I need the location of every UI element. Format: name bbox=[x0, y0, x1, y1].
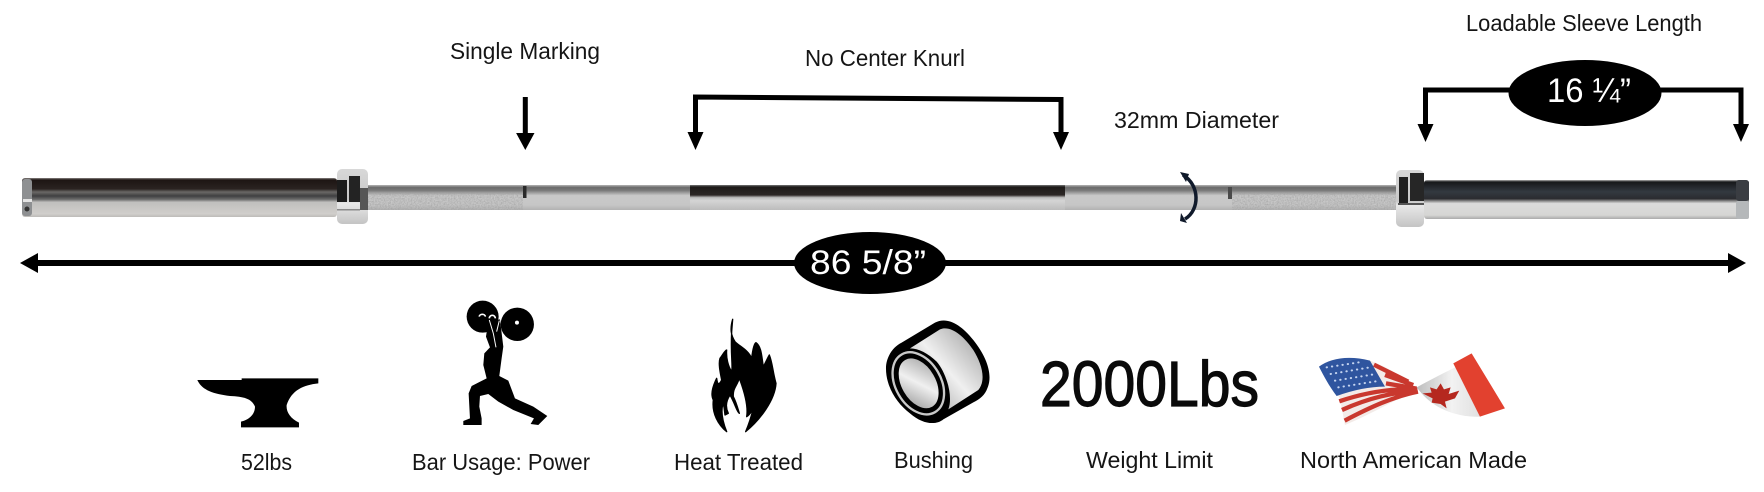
arrow: single marking bbox=[516, 97, 534, 150]
right sleeve end cap bbox=[1736, 180, 1749, 219]
bracket: sleeve length bbox=[1418, 90, 1749, 142]
right knurl marking bbox=[1228, 187, 1232, 199]
label: heat treated: Heat Treated bbox=[674, 449, 803, 475]
icon: flame bbox=[712, 319, 776, 432]
shaft: smooth center section bbox=[690, 185, 1065, 210]
badge: overall length value: 86 5/8” bbox=[810, 244, 926, 282]
right collar bbox=[1396, 170, 1424, 227]
label: weight: 52lbs bbox=[241, 449, 292, 475]
badge: sleeve length value: 16 ¼” bbox=[1547, 72, 1631, 110]
shaft: right knurled section bbox=[1065, 185, 1396, 210]
barbell bbox=[22, 169, 1749, 227]
label: weight limit: Weight Limit bbox=[1086, 447, 1214, 473]
figure: weight limit value: 2000Lbs bbox=[1040, 348, 1259, 420]
label: no center knurl: No Center Knurl bbox=[805, 45, 965, 71]
badge: sleeve length value bbox=[1508, 60, 1662, 126]
badge: overall length value bbox=[794, 232, 946, 294]
left collar bbox=[337, 169, 368, 224]
Canada flag red band bbox=[1453, 353, 1505, 417]
icon: US and Canada flags bbox=[1319, 353, 1505, 425]
Canada flag white field bbox=[1417, 367, 1487, 417]
arrow: overall length bbox=[20, 253, 1746, 273]
label: bar usage: Bar Usage: Power bbox=[412, 449, 590, 475]
label: single marking: Single Marking bbox=[450, 38, 600, 64]
label: loadable sleeve length: Loadable Sleeve Length bbox=[1466, 10, 1702, 36]
label: North American made: North American Made bbox=[1300, 447, 1527, 473]
US flag stripes bbox=[1339, 365, 1418, 421]
shaft: left knurled section bbox=[367, 185, 690, 210]
label: bushing: Bushing bbox=[894, 447, 973, 473]
right sleeve bbox=[1424, 180, 1749, 219]
US flag stars bbox=[1327, 362, 1380, 387]
left sleeve bbox=[22, 178, 337, 217]
bracket: no center knurl bbox=[688, 97, 1069, 150]
US flag canton bbox=[1319, 358, 1385, 396]
icon: rotation arrow around shaft bbox=[1180, 172, 1196, 223]
icon: anvil bbox=[197, 378, 318, 427]
knurl texture right bbox=[1232, 192, 1396, 210]
left knurl marking bbox=[523, 186, 526, 198]
icon: bushing bbox=[882, 320, 990, 424]
icon: weightlifter bbox=[463, 301, 547, 425]
left sleeve end cap bbox=[22, 179, 32, 216]
label: 32mm diameter: 32mm Diameter bbox=[1114, 107, 1279, 133]
US flag field bbox=[1319, 358, 1418, 425]
Canada maple leaf bbox=[1423, 383, 1459, 408]
knurl texture left bbox=[368, 192, 523, 210]
